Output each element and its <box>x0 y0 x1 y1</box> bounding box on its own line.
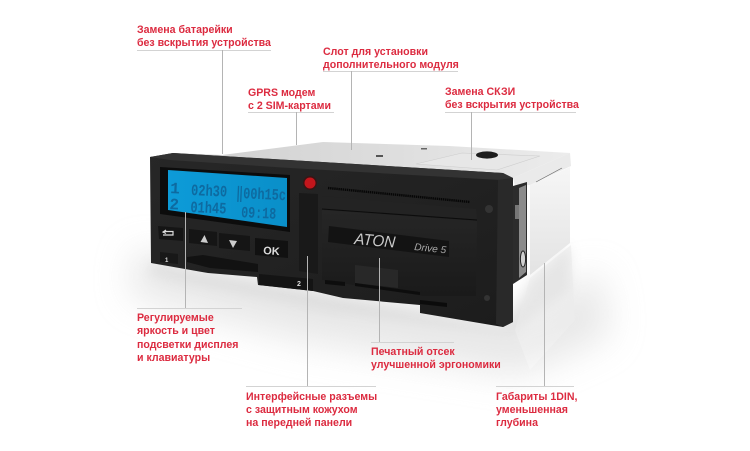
callout: battery replacement: Замена батарейки <box>137 24 233 36</box>
device shadow and floor reflection <box>130 245 610 375</box>
label strip <box>328 226 449 257</box>
callout: adjustable backlight: Регулируемые <box>137 312 214 324</box>
up key <box>189 229 217 246</box>
LCD display: 02h30 <box>191 182 227 202</box>
callout: GPRS modem <box>248 87 334 145</box>
callout: GPRS modem: GPRS модем <box>248 87 315 99</box>
LCD display <box>168 170 287 227</box>
tachograph device <box>150 142 571 327</box>
paper slot <box>328 188 470 202</box>
callout: printer bay: улучшенной эргономики <box>371 359 501 371</box>
key 2: 2 <box>297 281 301 288</box>
callout: interface connectors: Интерфейсные разъемы <box>246 391 377 403</box>
right edge <box>496 178 513 327</box>
key 1 <box>160 252 178 264</box>
device top cover <box>173 142 570 178</box>
callout: adjustable backlight: и клавиатуры <box>137 352 210 364</box>
callout: adjustable backlight: подсветки дисплея <box>137 339 238 351</box>
LCD display: 1 <box>170 180 180 199</box>
LCD display: 09:18 <box>241 204 277 224</box>
callout: 1DIN dimensions: уменьшенная <box>496 404 568 416</box>
interface cover <box>299 193 318 274</box>
OK key: OK <box>263 245 280 258</box>
keypad <box>158 226 313 291</box>
printer <box>322 188 477 307</box>
LCD display: 2 <box>169 196 179 215</box>
callout: interface connectors <box>246 256 377 429</box>
key 1: 1 <box>165 258 169 264</box>
device right side panel <box>513 153 571 284</box>
display bezel <box>160 167 290 232</box>
LCD display: ‖00h15c <box>236 185 286 205</box>
down key <box>219 233 250 251</box>
logo ATON: ATON <box>353 231 396 252</box>
callout: crypto module replacement <box>445 86 579 160</box>
callout: extra module slot: дополнительного модуля <box>323 59 459 71</box>
LCD display: 01h45 <box>190 199 227 219</box>
top bevel <box>150 153 513 180</box>
callout: battery replacement <box>137 24 271 154</box>
screws <box>484 205 493 301</box>
callout: crypto module replacement: без вскрытия устройства <box>445 99 579 111</box>
callout: interface connectors: на передней панели <box>246 417 352 429</box>
card slot 1 <box>187 255 258 272</box>
callout: crypto module replacement: Замена СКЗИ <box>445 86 515 98</box>
callout: interface connectors: с защитным кожухом <box>246 404 358 416</box>
callout: extra module slot <box>323 46 459 150</box>
callout: 1DIN dimensions: глубина <box>496 417 538 429</box>
card slot 2 <box>325 280 345 286</box>
back key <box>158 226 183 241</box>
key 2 <box>259 274 313 291</box>
callout: adjustable backlight: яркость и цвет <box>137 325 215 337</box>
callout: 1DIN dimensions: Габариты 1DIN, <box>496 391 577 403</box>
callout: extra module slot: Слот для установки <box>323 46 428 58</box>
callout: adjustable backlight <box>137 212 242 364</box>
callout: printer bay: Печатный отсек <box>371 346 455 358</box>
device front body <box>150 153 513 327</box>
model name: Drive 5 <box>414 242 447 256</box>
callout: battery replacement: без вскрытия устройства <box>137 37 271 49</box>
OK key <box>255 238 288 258</box>
printer cover <box>322 210 477 296</box>
callout: printer bay <box>371 258 501 371</box>
paper latch <box>355 265 398 288</box>
callout: 1DIN dimensions <box>496 263 577 429</box>
callout: GPRS modem: с 2 SIM-картами <box>248 100 331 112</box>
status LED <box>303 176 317 190</box>
